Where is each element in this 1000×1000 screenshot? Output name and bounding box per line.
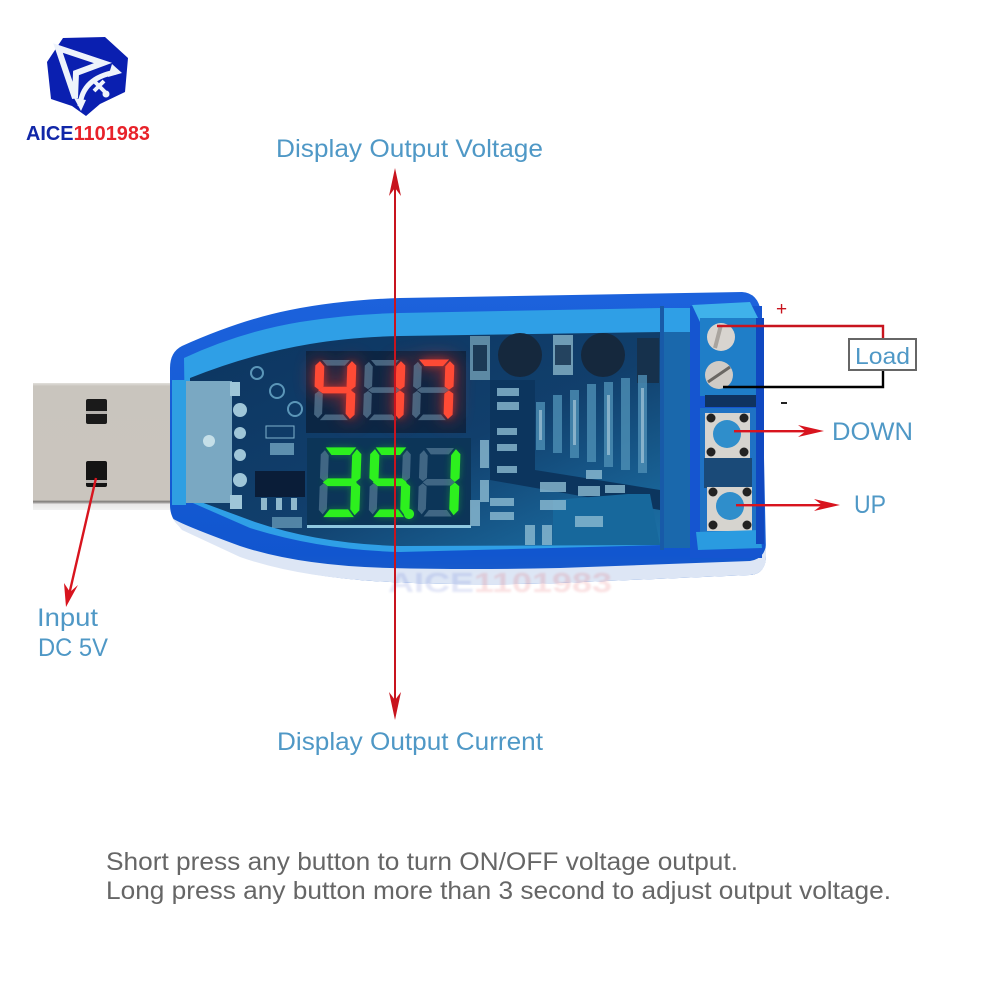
USB plug [33,383,173,510]
minus sign [781,402,787,404]
instruction text: Long press any button more than 3 second to adjust output voltage. [106,877,891,905]
PCB right components [470,333,660,545]
load box [849,339,916,370]
arrow: DOWN [734,425,824,437]
USB hole lower [86,461,107,487]
label: UP: UP [854,491,886,519]
UP button [707,487,752,531]
load wiring [717,299,916,404]
arrow: input [64,478,96,607]
label: Display Output Current: Display Output Current [277,728,543,756]
white bottom rim [172,518,766,584]
logo wordmark: AICE1101983 [26,123,150,145]
blue terminal block [700,318,758,396]
diagonal component reflections [536,375,647,473]
label: Input DC 5V [37,604,108,662]
green digits glow [323,448,460,518]
small chips [470,388,625,545]
terminal section shell [660,302,764,558]
arrow: display voltage and current [389,168,401,720]
instruction text [106,848,891,905]
label: Input DC 5V: Input [37,604,98,632]
label: Input DC 5V: DC 5V [38,634,108,662]
PCB left details [251,367,305,528]
label: DOWN: DOWN [832,418,913,446]
plus sign: + [776,299,787,320]
plus wire [717,326,883,339]
instruction text: Short press any button to turn ON/OFF voltage output. [106,848,738,876]
red display panel [306,351,466,433]
green display panel [307,438,471,528]
red digits 4 1 7 [314,360,454,418]
inner light window [184,308,662,552]
dark trace area [490,380,660,510]
label: Display Output Voltage: Display Output Voltage [276,135,543,163]
terminal screw top [707,323,735,351]
inductor right [581,333,625,377]
inductor left [498,333,542,377]
arrow: UP [736,499,840,511]
USB metal shield inside case [186,381,232,503]
red digits glow [314,360,454,418]
icon: blue shield badge [47,37,128,116]
plug metal inside case [172,380,186,505]
ghost segments red display [314,360,454,420]
USB hole upper [86,399,107,424]
USB module case [170,292,766,584]
terminal screw bottom [705,361,733,389]
outer shell [170,292,766,584]
DOWN button [705,413,750,458]
red display wide halo [314,360,454,418]
ghost segments green display [319,448,460,516]
watermark: AICE 1101983 [388,567,612,598]
load box: Load [855,343,910,369]
PCB board [190,332,662,546]
green digits 3 5 . 1 [323,448,460,518]
PCB strip beside terminal [662,332,692,548]
dark pad lower [553,494,660,545]
USB pins [230,382,247,509]
logo: AICE1101983 [26,37,150,145]
minus wire [723,370,883,387]
